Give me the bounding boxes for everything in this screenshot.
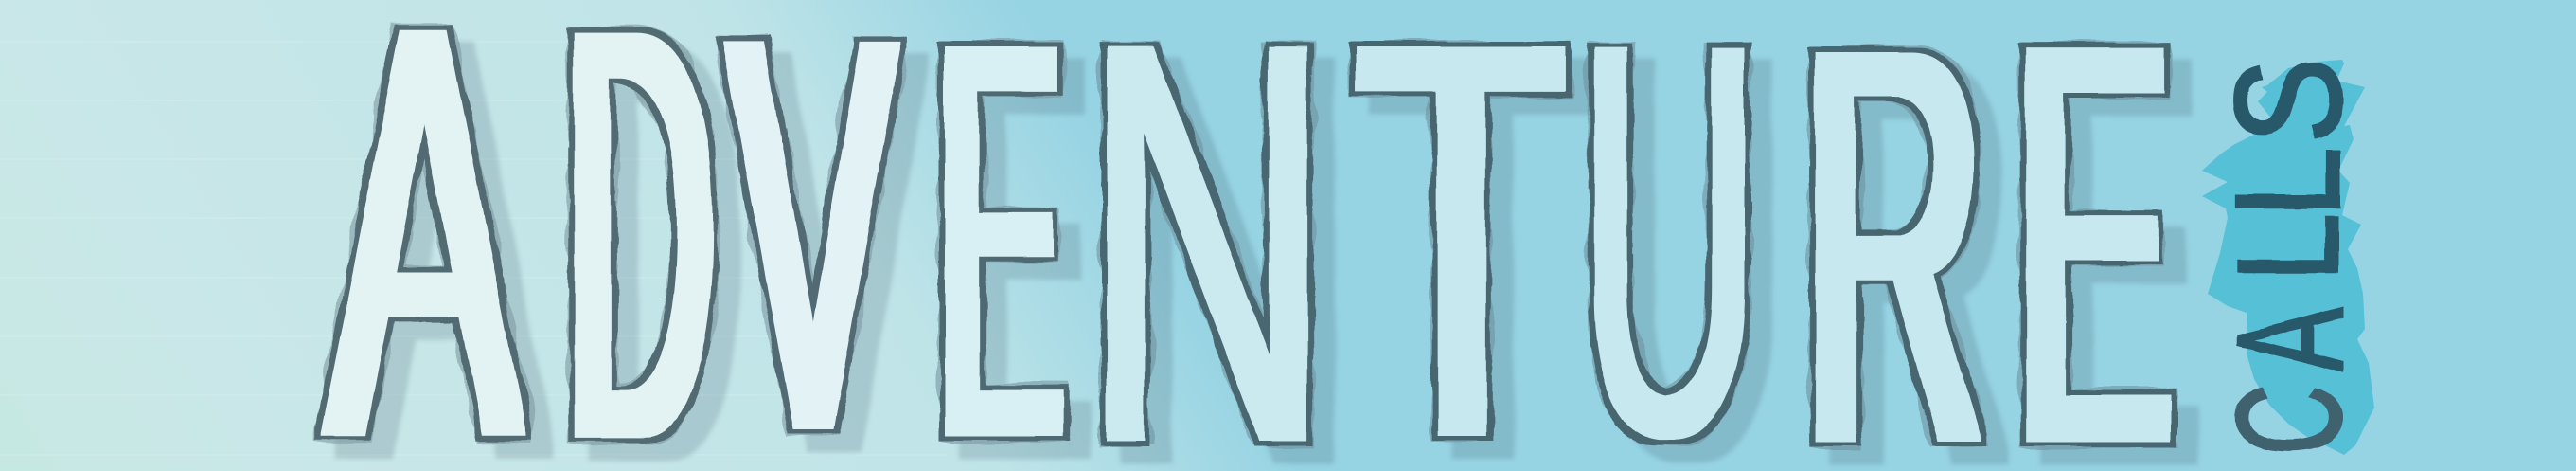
letter S: S: [2204, 59, 2374, 143]
letter L: L: [2210, 214, 2369, 281]
letter A: A: [2206, 308, 2376, 371]
letter C: C: [2207, 385, 2373, 455]
title: ADVENTURE: [312, 0, 2340, 471]
letter L: L: [2205, 147, 2372, 218]
word: CALLS rotated: [2231, 57, 2359, 455]
